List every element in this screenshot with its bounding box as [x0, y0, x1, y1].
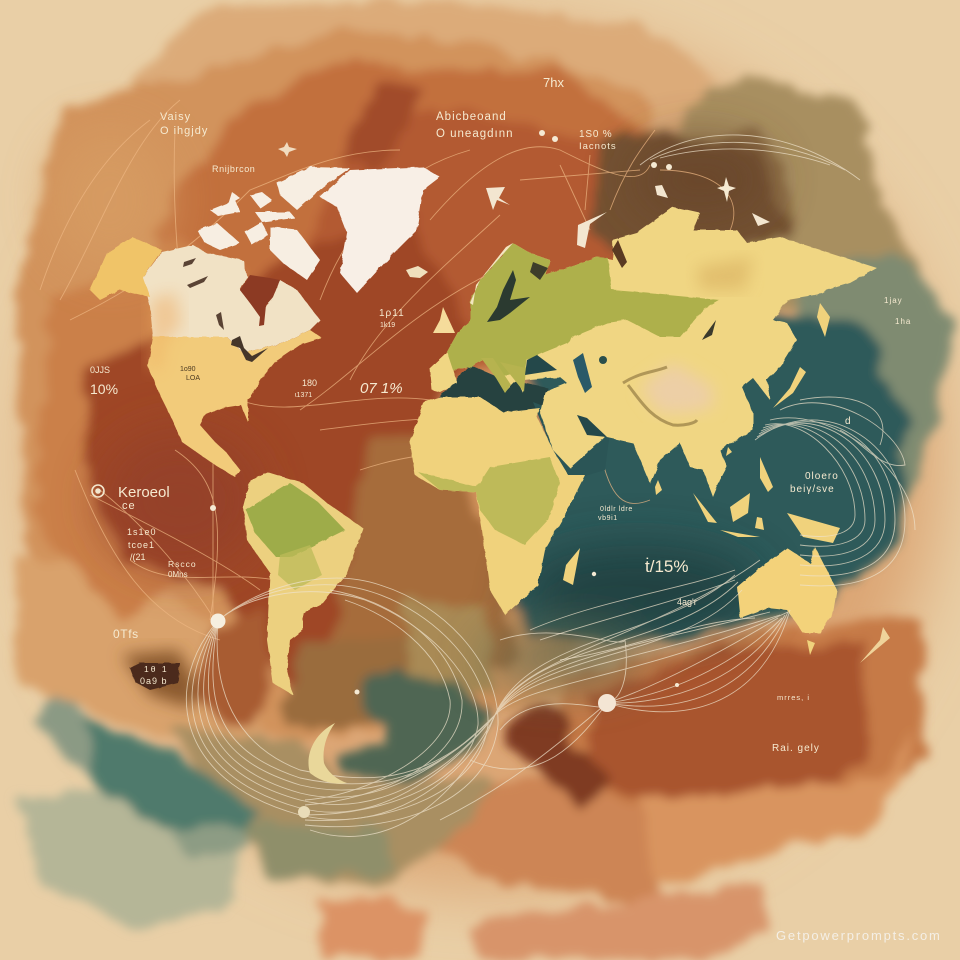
continent: South America: [243, 472, 363, 695]
label: Abicbeoand: Abicbeoand: [436, 111, 507, 123]
label: d: d: [845, 416, 851, 427]
label: Rnijbrcon: Rnijbrcon: [212, 164, 255, 174]
label: 180: 180: [302, 378, 317, 388]
star: north: [278, 142, 297, 157]
Alaska: [90, 237, 162, 300]
label: block b: vb9i1: [598, 515, 618, 522]
label: 15%: ṫ/15%: [645, 557, 688, 576]
label: 0Tfs: 0Tfs: [113, 627, 139, 641]
label: Rscco: Rscco: [168, 559, 197, 569]
map nodes and stars: [92, 130, 736, 818]
flow lines: Western Pacific loops: [640, 135, 915, 586]
label: block 3: /(21: [130, 552, 146, 562]
great lakes: [231, 336, 268, 362]
label: 1ha: 1ha: [895, 317, 911, 326]
crescent wave: [308, 723, 347, 784]
label: 10%: 10%: [90, 381, 118, 397]
dark label patch: [122, 650, 200, 708]
labels: Indian Ocean and Pacific: [598, 296, 911, 754]
green lowlands of Europe and Russia: [447, 243, 720, 375]
node: South Atlantic: [210, 614, 226, 628]
flow lines: S-shaped current bundle: [186, 560, 788, 836]
label: mrres: mrres, i: [777, 693, 810, 702]
inland seas: [487, 270, 530, 322]
flow lines: Pacific fan from lower node: [530, 570, 790, 712]
node: South Pacific: [598, 694, 616, 712]
star: north east: [717, 177, 736, 202]
Arctic islands: [197, 167, 350, 280]
fine route lines: [40, 100, 734, 640]
label: O ihgjaly: O ihgjdy: [160, 125, 208, 137]
islands: [433, 303, 890, 663]
label: dark box 2: 0a9 b: [140, 676, 168, 686]
United States and Mexico: [148, 330, 322, 477]
label: dark box 1: 1θ 1: [144, 664, 169, 674]
node: target ring: [92, 485, 104, 497]
Hudson Bay: [240, 275, 280, 326]
continent: Australia: [737, 547, 837, 633]
dark green shoal: [333, 668, 492, 778]
label: 7hx: 7hx: [543, 75, 564, 90]
Canada: [143, 245, 320, 353]
Italy and the Balkans: [481, 358, 526, 393]
Tibetan plateau: [640, 363, 713, 413]
label: Rai gely: Rai. gely: [772, 743, 820, 754]
dark wine shoal: [498, 710, 610, 810]
label: block 2: tcoe1: [128, 540, 155, 550]
watermark: Getpowerprompts.com: [776, 928, 942, 943]
label: ce: ce: [122, 500, 136, 512]
label: O uneagdinn: O uneagdınn: [436, 128, 514, 140]
label: 0ss: 0JJS: [90, 365, 110, 375]
label: 4agr: 4ag'r: [677, 597, 697, 607]
labels: South Pacific: [113, 484, 197, 686]
node: lower ring: [298, 806, 310, 818]
label: block a: 0ldlr ldre: [600, 506, 633, 513]
labels: North Pacific and Arctic: [90, 111, 405, 399]
soft shading across oceans: [50, 130, 770, 686]
label: 1pai: 1ρ11: [379, 308, 405, 319]
label: 1S0: 1S0 %: [579, 129, 612, 140]
continent: Africa: [410, 397, 585, 615]
label: LOA 2: LOA: [186, 375, 200, 382]
label: LOA: 1o90: [180, 366, 196, 373]
small dots: [210, 130, 679, 694]
label: 1jay: 1jay: [884, 296, 903, 305]
label: Oloero: 0loero: [805, 471, 839, 482]
label: small 180: ɩ1371: [295, 392, 312, 399]
label: lacnots: Iacnots: [579, 141, 617, 152]
label: block 1: 1s1e0: [127, 527, 157, 537]
label: Vaisy: Vaisy: [160, 111, 191, 123]
arctic ice shards: [486, 185, 770, 248]
labels: Atlantic north: [436, 75, 617, 152]
label: beiy: beiγ/sve: [790, 484, 835, 495]
label: small: 1k19: [380, 322, 395, 329]
label: Keroeol: Keroeol: [118, 484, 170, 501]
continent: North America: [90, 167, 350, 477]
Kara sea inlets: [612, 240, 627, 268]
label: 0Mns: 0Mns: [168, 570, 188, 579]
continent: Eurasia: [430, 207, 877, 497]
continent: Greenland: [320, 167, 440, 293]
label: percent: 07 1%: [360, 380, 403, 397]
seas behind the continents: [438, 365, 610, 482]
